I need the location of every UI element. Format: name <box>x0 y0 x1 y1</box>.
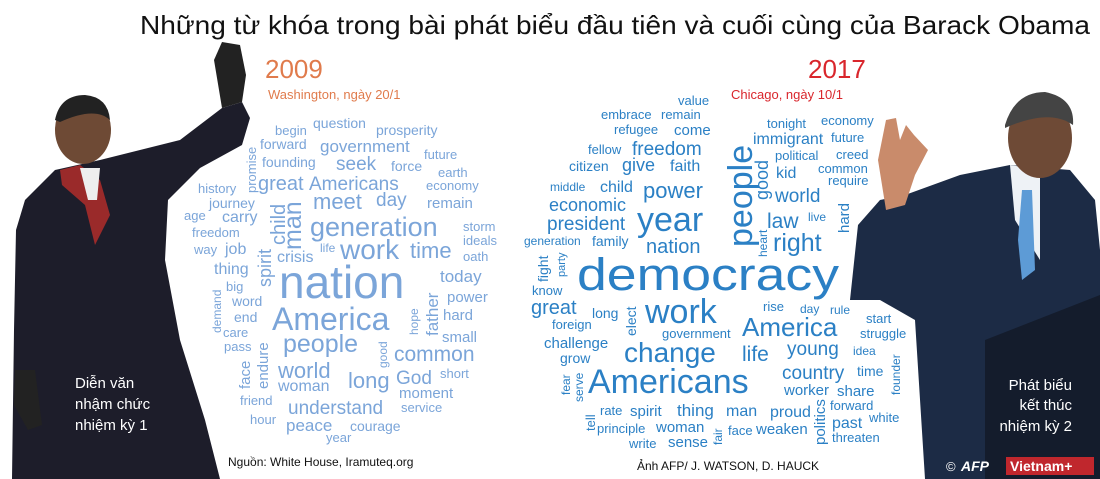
caption: right photo: Phát biểu <box>1009 377 1072 394</box>
caption: left photo: Diễn văn <box>75 375 134 392</box>
word cloud: 2017: worker <box>783 382 829 399</box>
word cloud: 2009: carry <box>222 209 258 226</box>
word cloud: 2009: work <box>339 234 400 265</box>
word cloud: 2017: young <box>787 339 839 360</box>
word cloud: 2009: hope <box>407 308 421 335</box>
word cloud: 2017: common <box>818 161 868 176</box>
word cloud: 2017: refugee <box>614 122 658 137</box>
word cloud: 2009: promise <box>244 147 259 193</box>
word cloud: 2017: start <box>866 311 892 326</box>
word cloud: 2017: life <box>742 343 769 366</box>
word cloud: 2009: way <box>193 242 218 257</box>
word cloud: 2017: work <box>644 293 718 331</box>
word cloud: 2009: courage <box>350 418 401 434</box>
word cloud: 2017: economy <box>821 113 874 128</box>
word cloud: 2017: threaten <box>832 430 880 445</box>
word cloud: 2017: country <box>782 363 845 384</box>
word cloud: 2017: white <box>868 410 899 425</box>
source note: Nguồn: White House, Iramuteq.org <box>228 455 413 469</box>
word cloud: 2017: write <box>628 436 656 451</box>
word cloud: 2017: middle <box>550 180 586 194</box>
word cloud: 2009: father <box>423 292 442 336</box>
word cloud: 2009: seek <box>336 154 377 175</box>
photo: Obama 2009 <box>12 42 250 479</box>
word cloud: 2017: challenge <box>544 335 608 352</box>
word cloud: 2017: embrace <box>601 107 652 122</box>
word cloud: 2017: creed <box>836 147 869 162</box>
word cloud: 2017: right <box>773 229 822 257</box>
caption: right photo: nhiệm kỳ 2 <box>999 418 1072 435</box>
word cloud: 2017: nation <box>646 236 700 258</box>
word cloud: 2009: oath <box>463 249 488 264</box>
word cloud: 2017: thing <box>677 401 714 420</box>
word cloud: 2009: face <box>237 361 254 389</box>
word cloud: 2017: man <box>726 403 757 420</box>
word cloud: 2009: common <box>394 343 475 366</box>
word cloud: 2009: understand <box>288 398 383 419</box>
word cloud: 2009: spirit <box>255 249 275 287</box>
word cloud: 2009: great <box>258 173 304 195</box>
word cloud: 2009: meet <box>313 189 362 214</box>
word cloud: 2009: America <box>272 301 390 337</box>
word cloud: 2009: man <box>279 201 307 250</box>
word cloud: 2017: faith <box>670 158 700 175</box>
photo credit: Ảnh AFP/ J. WATSON, D. HAUCK <box>637 458 819 473</box>
word cloud: 2017: freedom <box>632 139 702 160</box>
word cloud: 2017: idea <box>853 344 876 358</box>
word cloud: 2017: government <box>662 326 731 341</box>
word cloud: 2009: storm <box>463 219 496 234</box>
word cloud: 2017: fair <box>711 428 725 445</box>
word cloud: 2017: give <box>622 155 655 175</box>
word cloud: 2017: require <box>828 173 868 188</box>
word cloud: 2009: power <box>447 289 488 306</box>
word cloud: 2009: word <box>231 293 262 309</box>
word cloud: 2009: future <box>424 147 457 162</box>
word cloud: 2017: face <box>728 423 753 438</box>
word cloud: 2017: citizen <box>569 158 609 174</box>
word cloud: 2017: fight <box>535 255 551 282</box>
word cloud: 2017: struggle <box>860 326 906 341</box>
word cloud: 2009: forward <box>260 136 307 152</box>
word cloud: 2009: remain <box>427 195 473 212</box>
logo: AFP Vietnam+: Vietnam+ <box>1010 458 1072 474</box>
word cloud: 2017: future <box>831 130 864 145</box>
word cloud: 2009: good <box>376 341 390 368</box>
title: Những từ khóa trong bài phát biểu đầu tiên và cuối cùng của Barack Obama <box>140 10 1091 40</box>
word cloud: 2009: year <box>326 430 352 445</box>
word cloud: 2009: age <box>184 208 206 223</box>
heading: 2009: Washington, ngày 20/1 <box>268 87 400 102</box>
word cloud: 2009: ideals <box>463 233 497 248</box>
word cloud: 2009: moment <box>399 385 454 402</box>
word cloud: 2017: immigrant <box>753 131 824 148</box>
word cloud: 2017: America <box>742 312 838 342</box>
word cloud: 2009: Americans <box>309 174 399 195</box>
word cloud: 2009: thing <box>214 261 249 278</box>
word cloud: 2009: nation <box>279 256 404 308</box>
word cloud: 2009: freedom <box>192 225 240 240</box>
caption: right photo <box>999 377 1072 435</box>
word cloud: 2017 <box>524 93 906 451</box>
word cloud: 2009: begin <box>275 123 307 138</box>
word cloud: 2009: pass <box>224 339 252 354</box>
word cloud: 2009: life <box>320 241 336 255</box>
word cloud: 2009: care <box>223 325 248 340</box>
word cloud: 2009: job <box>224 241 246 258</box>
word cloud: 2009: question <box>313 115 366 131</box>
word cloud: 2009: history <box>198 181 237 196</box>
word cloud: 2017: generation <box>524 234 581 248</box>
word cloud: 2017: tell <box>583 414 598 431</box>
word cloud: 2017: heart <box>756 229 770 257</box>
word cloud: 2017: politics <box>812 399 829 445</box>
word cloud: 2009: hour <box>250 412 277 427</box>
caption: left photo: nhậm chức <box>75 396 151 413</box>
word cloud: 2009: generation <box>310 212 438 242</box>
word cloud: 2017: economic <box>549 195 626 215</box>
word cloud: 2017: democracy <box>577 249 840 300</box>
word cloud: 2017: share <box>837 383 875 400</box>
word cloud: 2009: force <box>391 158 422 174</box>
word cloud: 2009: woman <box>277 378 330 395</box>
word cloud: 2009: endure <box>255 342 272 389</box>
word cloud: 2009: prosperity <box>376 122 437 138</box>
word cloud: 2017: serve <box>572 372 586 402</box>
word cloud: 2017: fellow <box>588 142 622 157</box>
word cloud: 2009: hard <box>443 307 473 324</box>
word cloud: 2017: change <box>624 337 716 368</box>
word cloud: 2017: tonight <box>767 116 806 131</box>
caption: right photo: kết thúc <box>1019 397 1072 414</box>
word cloud: 2017: proud <box>770 404 811 421</box>
word cloud: 2017: past <box>832 415 863 432</box>
word cloud: 2009: short <box>440 366 469 381</box>
word cloud: 2009: economy <box>426 178 479 193</box>
word cloud: 2009: world <box>277 358 331 383</box>
word cloud: 2017: sense <box>668 434 708 451</box>
word cloud: 2017: good <box>752 160 772 200</box>
word cloud: 2017: foreign <box>552 317 592 332</box>
word cloud: 2017: hard <box>836 203 853 233</box>
heading: 2009: 2009 <box>265 54 323 84</box>
word cloud: 2017: time <box>857 363 884 379</box>
word cloud: 2017: weaken <box>755 421 808 438</box>
word cloud: 2009: small <box>442 329 477 346</box>
word cloud: 2017: rate <box>600 403 622 418</box>
caption: left photo: nhiệm kỳ 1 <box>75 417 148 434</box>
word cloud: 2009: end <box>234 309 257 325</box>
word cloud: 2009: journey <box>208 195 255 211</box>
word cloud: 2009: long <box>348 368 390 393</box>
word cloud: 2009: people <box>283 330 358 358</box>
word cloud: 2009: government <box>320 137 410 156</box>
word cloud: 2017: rule <box>830 303 850 317</box>
word cloud: 2009: friend <box>240 393 273 408</box>
word cloud: 2017: political <box>775 148 818 163</box>
logo: AFP Vietnam+: © <box>946 459 956 474</box>
word cloud: 2017: law <box>767 210 799 233</box>
word cloud: 2017: year <box>637 201 703 239</box>
word cloud: 2017: Americans <box>588 363 749 401</box>
word cloud: 2017: know <box>532 283 563 298</box>
word cloud: 2017: day <box>800 302 819 316</box>
word cloud: 2017: party <box>556 252 568 277</box>
heading: 2009 <box>265 54 400 102</box>
word cloud: 2009: day <box>376 190 407 211</box>
word cloud: 2017: great <box>531 297 577 319</box>
word cloud: 2017: fear <box>559 374 573 395</box>
word cloud: 2009: service <box>401 400 442 415</box>
word cloud: 2009: earth <box>438 165 468 180</box>
word cloud: 2017: world <box>774 186 820 207</box>
word cloud: 2017: principle <box>597 421 645 436</box>
word cloud: 2017: founder <box>889 354 903 395</box>
word cloud: 2009: big <box>226 279 243 294</box>
logo: AFP Vietnam+ <box>946 457 1094 475</box>
word cloud: 2017: kid <box>776 165 796 182</box>
word cloud: 2017: live <box>808 210 826 224</box>
word cloud: 2017: value <box>678 93 709 108</box>
word cloud: 2017: woman <box>655 419 704 436</box>
word cloud: 2009: child <box>268 204 290 245</box>
word cloud: 2009: time <box>410 238 452 263</box>
word cloud: 2017: elect <box>623 306 639 336</box>
photo: Obama 2017 <box>850 92 1100 479</box>
word cloud: 2017: remain <box>661 107 701 122</box>
word cloud: 2009 <box>184 115 497 445</box>
heading: 2017: Chicago, ngày 10/1 <box>731 87 843 102</box>
word cloud: 2009: today <box>440 267 482 286</box>
word cloud: 2017: power <box>643 178 703 203</box>
word cloud: 2017: family <box>592 233 629 249</box>
word cloud: 2009: God <box>396 368 432 389</box>
word cloud: 2017: come <box>674 122 711 139</box>
word cloud: 2017: spirit <box>630 403 663 420</box>
word cloud: 2017: forward <box>830 398 873 413</box>
word cloud: 2009: crisis <box>277 249 313 266</box>
word cloud: 2017: child <box>600 179 633 196</box>
heading: 2017 <box>731 54 866 102</box>
heading: 2017: 2017 <box>808 54 866 84</box>
word cloud: 2017: grow <box>560 350 591 366</box>
word cloud: 2017: president <box>547 214 626 235</box>
word cloud: 2017: long <box>592 305 618 321</box>
caption: left photo <box>75 375 151 434</box>
logo: AFP Vietnam+: AFP <box>960 458 990 474</box>
word cloud: 2017: rise <box>763 299 784 314</box>
word cloud: 2009: demand <box>210 290 224 333</box>
word cloud: 2009: peace <box>286 416 332 435</box>
word cloud: 2009: founding <box>262 154 316 170</box>
word cloud: 2017: people <box>722 145 760 247</box>
